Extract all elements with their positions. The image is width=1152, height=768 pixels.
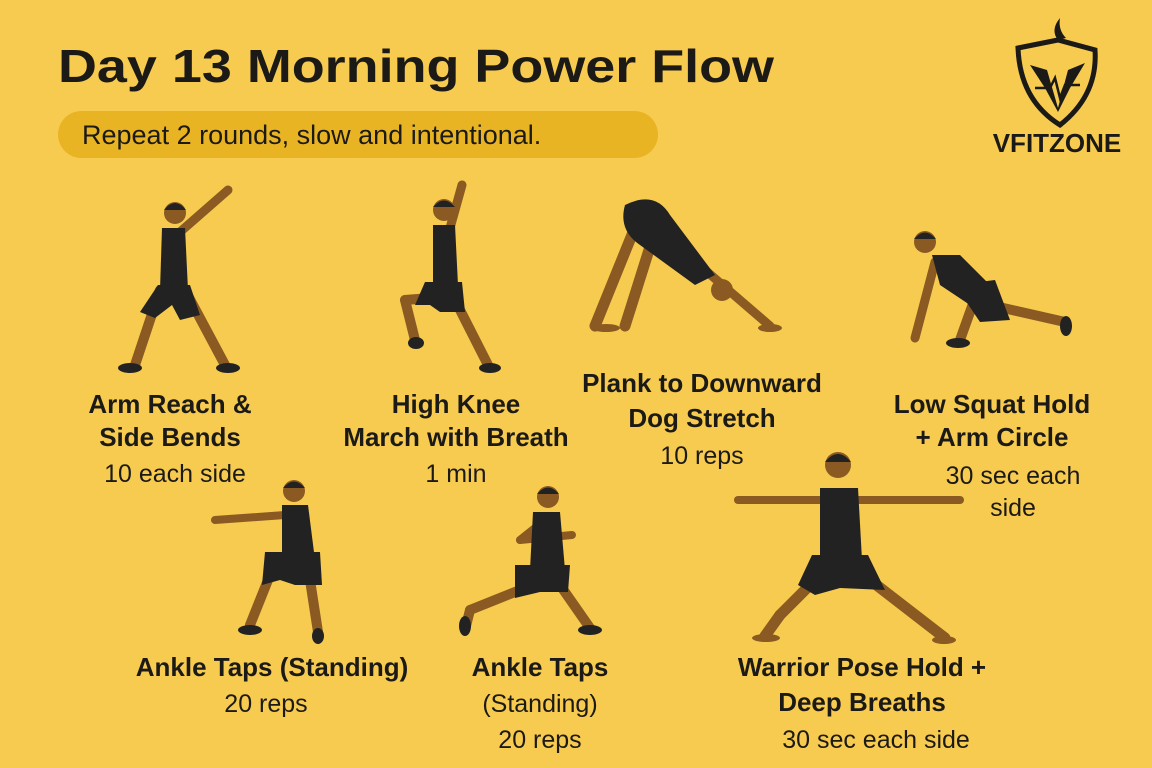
label: ankle taps 2: 20 reps xyxy=(498,726,582,754)
label: warrior: Deep Breaths xyxy=(778,687,946,717)
label: ankle taps 2: Ankle Taps xyxy=(472,652,608,682)
label: low squat: + Arm Circle xyxy=(916,422,1068,452)
title: Day 13 Morning Power Flow xyxy=(58,40,774,92)
label: low squat: Low Squat Hold xyxy=(894,389,1090,419)
label: warrior: 30 sec each side xyxy=(782,726,970,754)
subtitle pill: Repeat 2 rounds, slow and intentional. xyxy=(82,120,541,150)
label: high knee: 1 min xyxy=(425,460,487,488)
figure: downward dog xyxy=(592,199,782,332)
label: low squat: 30 sec each xyxy=(946,462,1080,490)
figure: lunge xyxy=(459,486,602,636)
figure: high knee march xyxy=(405,185,501,373)
label: ankle taps 2: (Standing) xyxy=(482,690,598,718)
label: warrior: Warrior Pose Hold + xyxy=(738,652,986,682)
label: high knee: High Knee xyxy=(392,389,520,419)
label: plank: Plank to Downward xyxy=(582,368,822,398)
figure: arm reach xyxy=(118,190,240,373)
label: plank: Dog Stretch xyxy=(628,403,776,433)
figure: warrior pose xyxy=(738,452,960,644)
figure: low squat xyxy=(914,231,1072,348)
label: arm reach: Side Bends xyxy=(99,422,241,452)
figure: squat arms forward xyxy=(215,480,324,644)
label: ankle taps 1: Ankle Taps (Standing) xyxy=(136,652,408,682)
label: low squat: side xyxy=(990,494,1036,522)
label: arm reach: Arm Reach & xyxy=(88,389,252,419)
label: ankle taps 1: 20 reps xyxy=(224,690,308,718)
label: plank: 10 reps xyxy=(660,442,744,470)
label: high knee: March with Breath xyxy=(343,422,569,452)
logo xyxy=(993,18,1121,158)
logo: VFITZONE xyxy=(993,128,1121,158)
label: arm reach: 10 each side xyxy=(104,460,246,488)
subtitle pill xyxy=(58,111,658,158)
